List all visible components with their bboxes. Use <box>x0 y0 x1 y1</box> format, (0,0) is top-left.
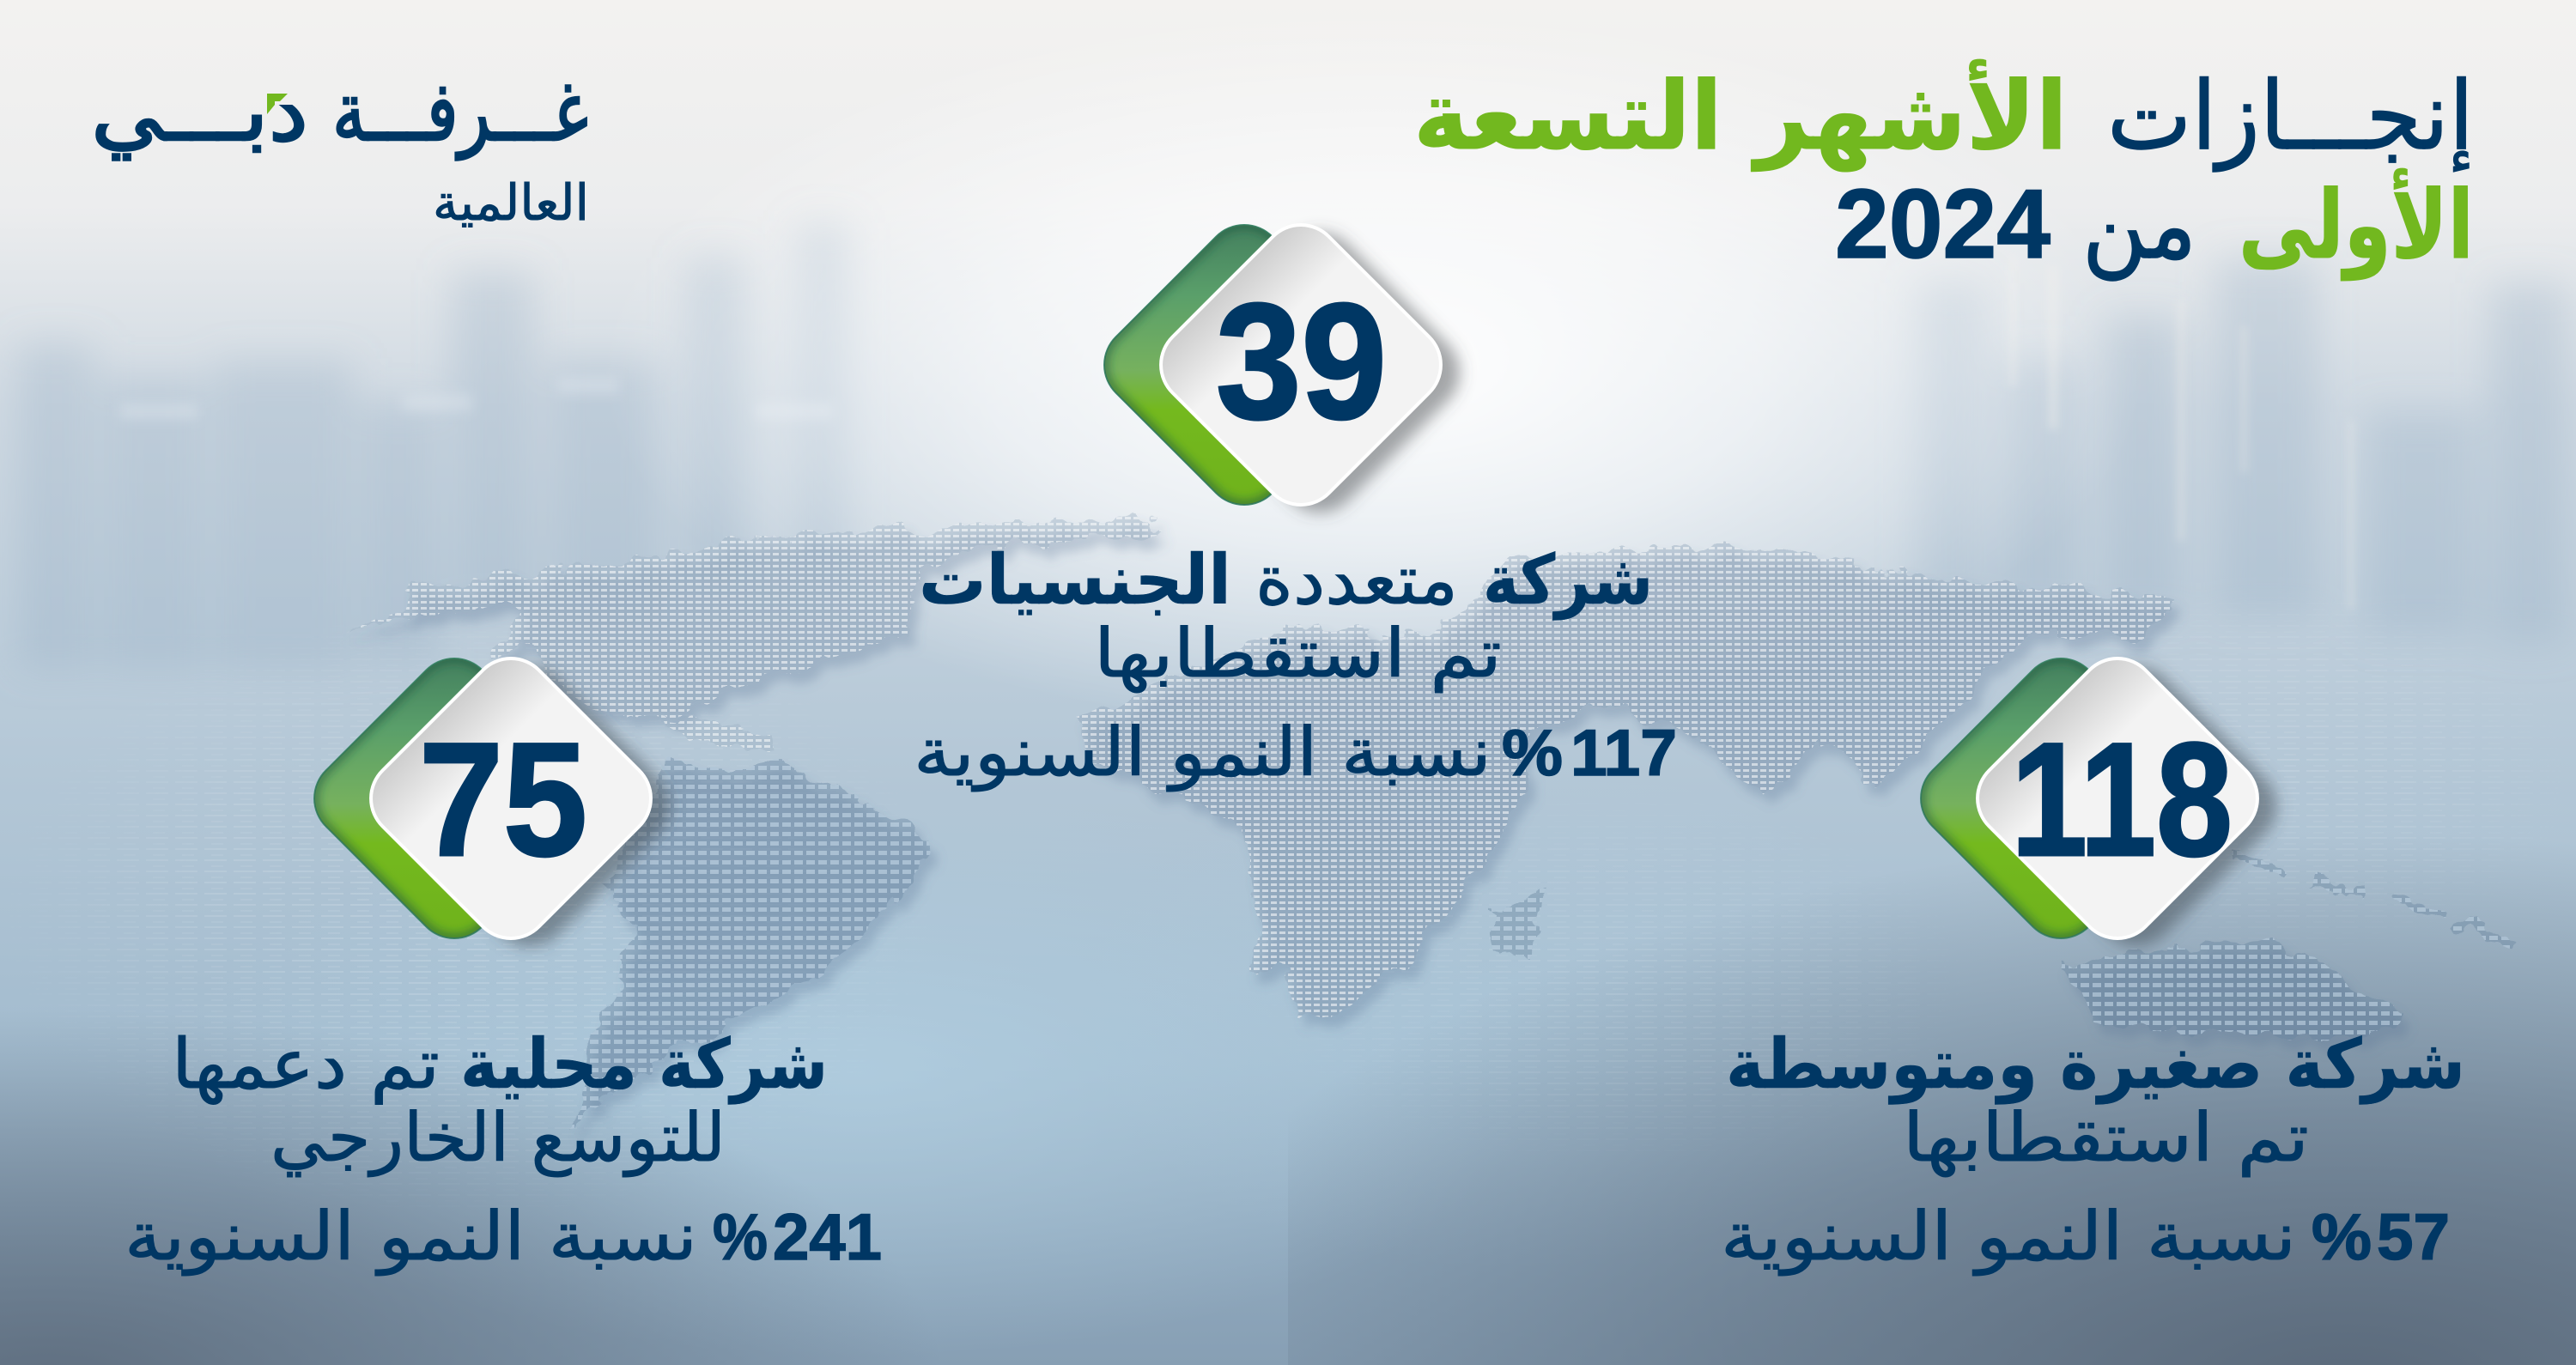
white front diamond <box>1978 658 2257 938</box>
line 1 <box>919 540 1653 621</box>
line 2: تم استقطابها <box>1903 1100 2309 1177</box>
central fog glow <box>601 9 2147 730</box>
white front diamond <box>371 658 651 938</box>
line 1: الجنسيات <box>919 540 1231 620</box>
title line 1: الأشهر التسعة <box>1413 59 2068 172</box>
world map: North America <box>347 513 1161 752</box>
line 1: متعددة <box>1255 540 1458 620</box>
world map shadows <box>355 528 2412 1138</box>
stat badge: 39 <box>1104 225 1460 513</box>
lower tonal light and shadow <box>172 790 1546 1356</box>
line 3: 241% annual growth: نسبة النمو السنوية <box>125 1198 697 1277</box>
line 2: تم استقطابها <box>1094 616 1502 693</box>
line 1: شركة <box>1483 540 1653 621</box>
line 3: 57% annual growth: 57 <box>2377 1201 2450 1274</box>
line 3: 57% annual growth: % <box>2312 1201 2372 1274</box>
line 2: للتوسع الخارجي <box>270 1100 726 1178</box>
logo subtitle: العالمية <box>433 173 589 232</box>
world map: South America <box>569 757 931 1130</box>
skyline on the left <box>17 223 850 670</box>
line 1: محلية <box>460 1024 637 1104</box>
number: 75 <box>419 709 587 889</box>
line 3: 241% annual growth: % <box>713 1201 768 1274</box>
logo green accent <box>267 94 288 114</box>
title line 2: 2024 <box>1835 170 2050 279</box>
text block: multinational companies <box>914 540 1677 792</box>
logo: Dubai Chamber International <box>91 64 589 232</box>
line 1 <box>172 1024 828 1105</box>
line 3: 241% annual growth <box>125 1198 882 1277</box>
line 1: تم دعمها <box>172 1024 440 1105</box>
title line 2: من <box>2082 170 2196 281</box>
title line 2: الأولى <box>2239 168 2474 281</box>
line 3: 241% annual growth: 241 <box>773 1201 882 1274</box>
green back diamond <box>1920 658 2088 939</box>
logo wordmark: دبـــي <box>91 64 308 161</box>
ground grid lines <box>179 781 635 1118</box>
text block: local companies <box>125 1024 882 1277</box>
title line 1: إنجـــازات <box>2107 61 2474 172</box>
stat badge: 118 <box>1921 658 2276 946</box>
title line 2 <box>1835 168 2474 281</box>
line 3: 117% annual growth: % <box>1502 717 1563 790</box>
title <box>1413 59 2474 281</box>
title line 1 <box>1413 59 2474 172</box>
line 1: شركة <box>659 1024 828 1105</box>
logo wordmark <box>91 64 588 161</box>
line 3: 117% annual growth: نسبة النمو السنوية <box>914 714 1492 792</box>
number: 39 <box>1216 269 1387 453</box>
world map: Eurasia and Africa <box>1077 541 2174 1018</box>
line 3: 57% annual growth: نسبة النمو السنوية <box>1721 1198 2296 1277</box>
text block: small and medium companies <box>1721 1024 2465 1277</box>
line 3: 117% annual growth <box>914 714 1677 792</box>
line 3: 117% annual growth: 117 <box>1571 717 1677 790</box>
line 1: شركة صغيرة ومتوسطة <box>1726 1024 2465 1105</box>
green back diamond <box>1103 224 1273 506</box>
skyline on the right <box>1915 258 2567 644</box>
white front diamond <box>1161 225 1441 505</box>
world map: Australia and islands <box>1488 850 2516 1041</box>
number: 118 <box>2011 709 2233 889</box>
green back diamond <box>313 658 483 939</box>
logo wordmark: غـــرفـــة <box>332 64 588 161</box>
stat badge: 75 <box>314 658 670 946</box>
